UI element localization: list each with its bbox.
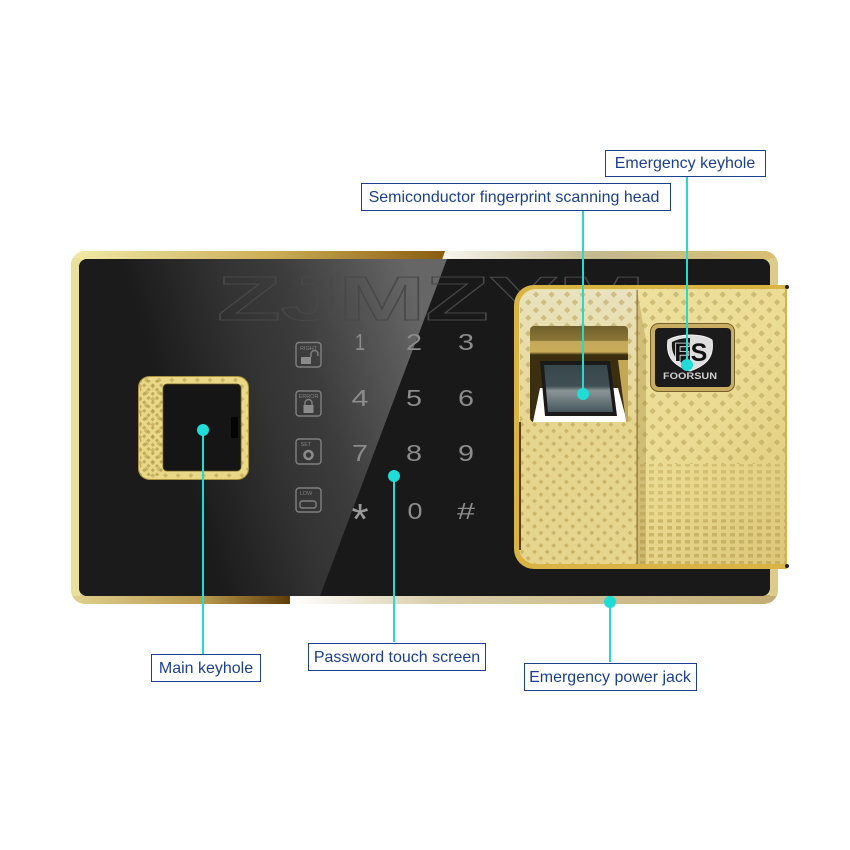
watermark: ZJMZYM outline text: ZJMZYM — [217, 265, 645, 334]
keypad — [351, 329, 475, 544]
icon: low battery — [296, 488, 321, 512]
callout: Emergency power jack — [524, 596, 696, 690]
icon: right unlocked: RIGHT — [300, 346, 318, 352]
panel: gold fingerprint module — [514, 285, 789, 569]
keypad: 8 — [406, 440, 422, 466]
keypad: 4 — [352, 385, 369, 411]
keypad: 9 — [458, 440, 474, 466]
infographic: safe control panel with callouts — [71, 150, 789, 691]
icon: FOORSUN badge — [650, 324, 734, 392]
callout: Main keyhole: Main keyhole — [159, 660, 253, 677]
callout: Semiconductor fingerprint scanning head — [362, 184, 670, 400]
icon: low battery: LOW — [300, 491, 313, 497]
icon: error locked: ERROR — [299, 394, 318, 400]
callout: Emergency keyhole: Emergency keyhole — [615, 155, 755, 172]
icon: set gear: SET — [301, 442, 312, 448]
keypad: 0 — [408, 498, 422, 524]
keypad: 1 — [355, 329, 365, 355]
keypad: 6 — [458, 385, 474, 411]
callout: Emergency power jack: Emergency power jack — [529, 669, 692, 686]
keypad: # — [457, 498, 475, 524]
status icons — [296, 342, 321, 512]
sliding cover — [520, 290, 637, 422]
icon: right unlocked — [296, 342, 321, 367]
icon: fingerprint scanner window — [530, 326, 628, 422]
callout: Password touch screen — [308, 470, 486, 670]
panel: black glass face — [79, 259, 770, 596]
icon: FOORSUN badge: F — [674, 339, 690, 367]
callout: Main keyhole — [152, 424, 260, 682]
callout: Password touch screen: Password touch screen — [314, 649, 480, 666]
keypad: 7 — [352, 440, 368, 466]
keypad: 3 — [458, 329, 474, 355]
panel: gold frame — [71, 251, 778, 604]
icon: main keyhole surround — [138, 376, 248, 480]
icon: FOORSUN badge: FOORSUN — [663, 371, 717, 381]
keypad: * — [351, 495, 369, 544]
callout: Semiconductor fingerprint scanning head: Semiconductor fingerprint scanning head — [369, 189, 659, 206]
keypad: 2 — [406, 329, 422, 355]
callout: Emergency keyhole — [606, 150, 766, 371]
icon: set gear — [296, 439, 321, 464]
keypad: 5 — [406, 385, 422, 411]
icon: error locked — [296, 391, 321, 416]
icon: FOORSUN badge: S — [691, 339, 707, 367]
